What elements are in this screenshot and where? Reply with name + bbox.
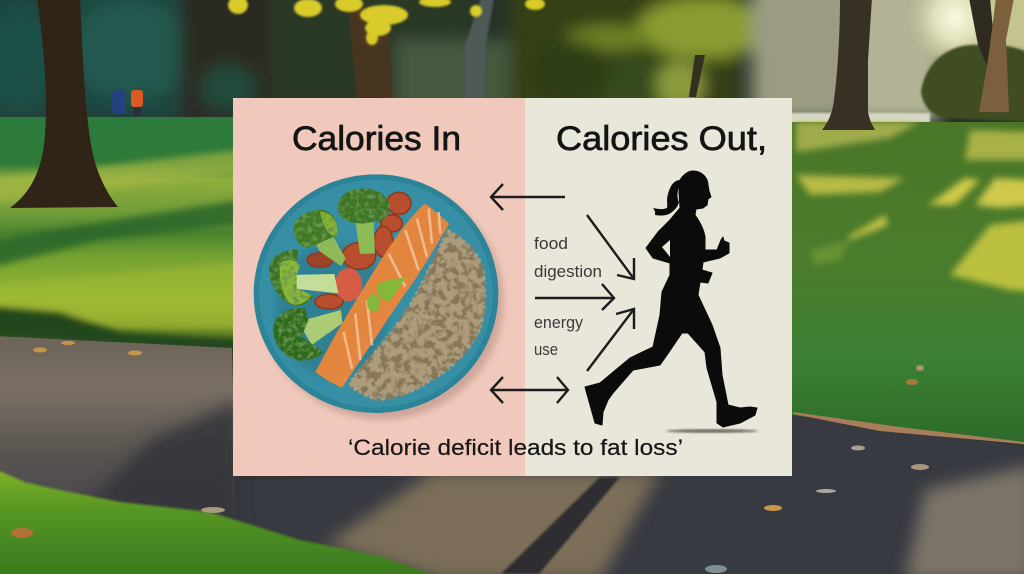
background: road left section: [0, 336, 236, 515]
label: use: use: [534, 341, 558, 359]
panel: calories out side: [525, 98, 792, 476]
background: right lawn: [790, 122, 1024, 445]
plate shadow: [260, 181, 504, 420]
label: energy: energy: [534, 314, 584, 332]
background: left lawn: [0, 117, 235, 349]
background: thin tree trunk: [689, 55, 705, 97]
arrow: right to runner: [535, 284, 614, 310]
illustration: running woman silhouette: [585, 171, 758, 433]
background: tree trunk pale: [465, 0, 494, 97]
ground shadow: [666, 429, 758, 433]
background: tree canopy: [0, 0, 1024, 122]
herb garnish: [367, 277, 406, 312]
broccoli stems: [288, 215, 375, 345]
background: distant people: [112, 90, 143, 115]
background: fallen leaves: [11, 341, 1024, 573]
background: forked trunks far right: [969, 0, 1014, 112]
background: tree trunk right: [822, 0, 875, 130]
arrow: down to runner: [587, 215, 634, 279]
runner head and body: [585, 171, 757, 427]
ponytail: [653, 180, 681, 216]
background: yellow leaves: [228, 0, 545, 45]
tomato slice: [335, 268, 362, 301]
broccoli crowns: [269, 188, 390, 361]
arm gap: [662, 240, 670, 257]
plate: [254, 174, 498, 413]
caption: ‘Calorie deficit leads to fat loss’: [348, 435, 683, 460]
background: lawn light and shadow: [0, 122, 1024, 352]
arrow: double headed: [491, 377, 568, 403]
background: bush right: [921, 44, 1024, 122]
tomato and carrot slices: [269, 188, 411, 361]
arrow: up to runner: [587, 309, 634, 371]
background: tree trunk centre: [348, 8, 393, 97]
background: tree trunk shadow on road: [501, 477, 620, 574]
salmon fillet: [315, 204, 449, 388]
heading: calories in: Calories In: [292, 120, 461, 158]
panel: infographic card: [233, 98, 792, 476]
illustration: plate of salmon, broccoli and quinoa: [254, 174, 504, 420]
background: road shadow bands: [90, 400, 1024, 574]
label: food: food: [534, 234, 568, 253]
background: road: [0, 336, 1024, 574]
background: distant path glow: [780, 113, 930, 123]
quinoa: [350, 232, 484, 399]
background: bottom-left grass: [0, 469, 442, 574]
panel: calories in side: [233, 98, 525, 476]
background: tree trunk left: [10, 0, 118, 208]
heading: calories out: Calories Out,: [556, 120, 767, 158]
label: digestion: digestion: [534, 262, 602, 281]
arrow: top left: [491, 184, 565, 210]
